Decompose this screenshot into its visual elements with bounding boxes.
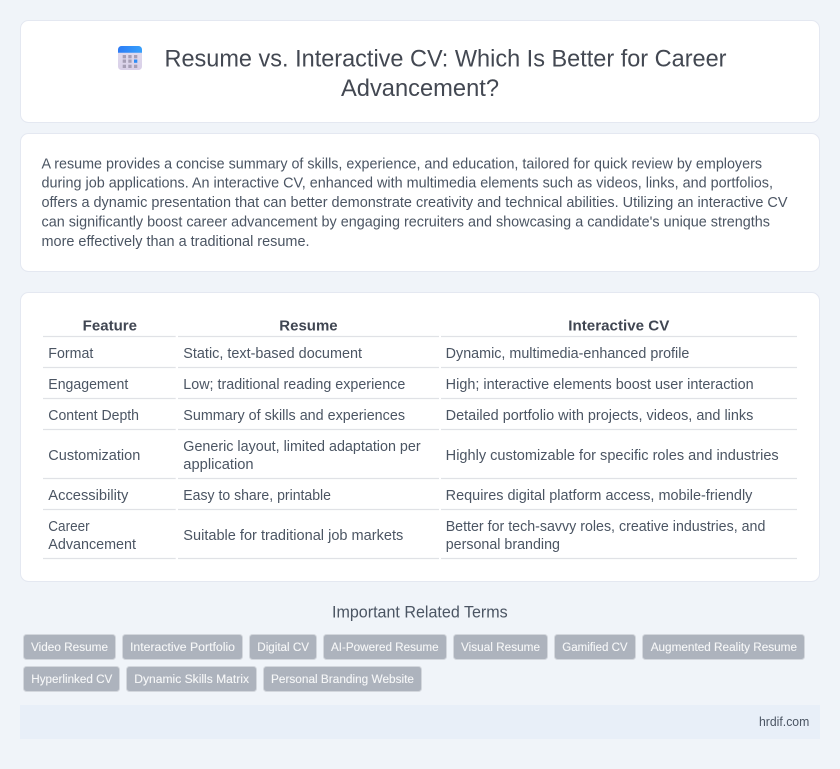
tag: personal branding website: Personal Branding Website [271,672,414,686]
tag: visual resume: Visual Resume [461,640,540,654]
tag: hyperlinked cv: Hyperlinked CV [31,672,113,686]
row: customization: Customization [48,448,140,464]
title [164,46,726,102]
row: content depth: Summary of skills and experiences [183,408,405,424]
footer: hrdif.com [759,714,809,729]
row: customization: Highly customizable for specific roles and industries [446,448,779,464]
row: accessibility [48,488,753,504]
related terms heading: Important Related Terms [332,603,508,621]
row: accessibility: Requires digital platform access, mobile-friendly [446,488,753,504]
table header row [83,318,669,335]
tag: personal branding website [264,666,422,692]
tag: augmented reality resume [642,634,804,660]
row: engagement: High; interactive elements boost user interaction [446,377,754,393]
row: career advancement [48,519,765,553]
summary paragraph: more effectively than a traditional resume. [42,234,310,250]
row: format: Static, text-based document [183,346,362,362]
row: career advancement: Suitable for traditional job markets [183,528,403,544]
summary panel [20,134,820,272]
tag: digital cv: Digital CV [257,640,310,654]
summary paragraph: A resume provides a concise summary of skills, experience, and education, tailored for quick review by employers [42,156,762,172]
tag: ai-powered resume: AI-Powered Resume [331,640,439,654]
row: customization [48,439,779,473]
summary paragraph: during job applications. An interactive CV, enhanced with multimedia elements such as videos, links, and portfolios, [42,176,773,192]
comparison table panel [20,292,820,582]
tag: interactive portfolio [122,634,242,660]
table grid lines [43,336,797,558]
tag: interactive portfolio: Interactive Portfolio [130,640,235,654]
tag: video resume [24,634,116,660]
row: engagement [48,377,754,393]
header panel [20,20,820,122]
row: career advancement: Better for tech-savvy roles, creative industries, and [446,519,765,535]
row: content depth: Content Depth [48,408,139,424]
related terms tags [24,634,804,692]
tag: digital cv [250,634,316,660]
title: Resume vs. Interactive CV: Which Is Better for Career [164,46,726,73]
summary paragraph [42,156,788,250]
table header row: Resume [279,318,338,335]
table header row: Feature [83,318,137,335]
icon: calendar [118,46,142,70]
row: career advancement: Advancement [48,537,136,553]
footer [20,705,820,739]
tag: visual resume [454,634,548,660]
row: career advancement: personal branding [446,537,560,553]
summary paragraph: offers a dynamic presentation that can better demonstrate creativity and technical abilities. Utilizing an interactive CV [42,195,788,211]
tag: hyperlinked cv [24,666,120,692]
summary paragraph: can significantly boost career advancement by engaging recruiters and showcasing a candidate's unique strengths [42,214,770,230]
row: customization: application [183,457,254,473]
tag: gamified cv [554,634,636,660]
row: format [48,346,689,362]
tag: video resume: Video Resume [31,640,108,654]
title: Advancement? [341,75,499,102]
row: engagement: Low; traditional reading experience [183,377,405,393]
table header row: Interactive CV [568,318,669,335]
row: engagement: Engagement [48,377,128,393]
tag: augmented reality resume: Augmented Reality Resume [651,640,797,654]
row: career advancement: Career [48,519,90,535]
tag: dynamic skills matrix [126,666,256,692]
row: content depth [48,408,753,424]
tag: gamified cv: Gamified CV [562,640,628,654]
row: content depth: Detailed portfolio with projects, videos, and links [446,408,753,424]
row: accessibility: Easy to share, printable [183,488,331,504]
row: accessibility: Accessibility [48,488,129,504]
row: format: Format [48,346,93,362]
row: customization: Generic layout, limited adaptation per [183,439,421,455]
tag: ai-powered resume [324,634,446,660]
row: format: Dynamic, multimedia-enhanced profile [446,346,689,362]
tag: dynamic skills matrix: Dynamic Skills Matrix [134,672,250,686]
